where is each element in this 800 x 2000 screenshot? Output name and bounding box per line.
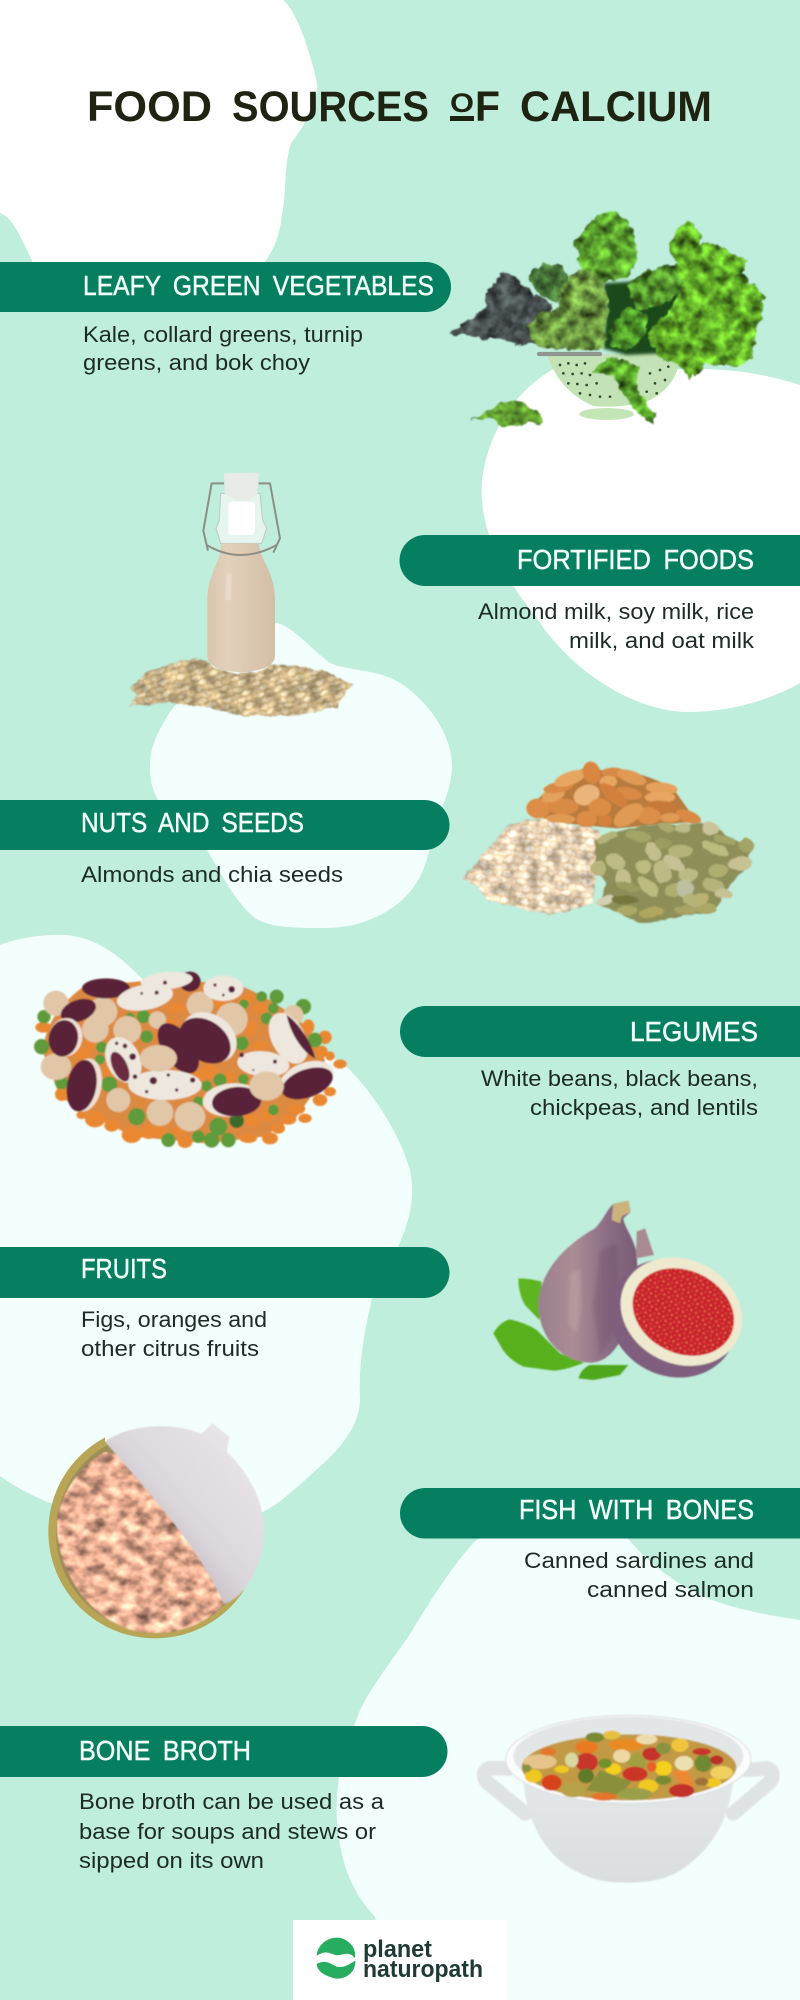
description: fruits: other citrus fruits: [81, 1336, 259, 1361]
blob: upper right white: [482, 368, 800, 712]
description: fish with bones: [524, 1548, 754, 1602]
image: bowl of vegetable soup: [484, 1715, 772, 1883]
heading bar: bone broth: [0, 1726, 448, 1777]
title: O: [450, 88, 474, 118]
vegetables: [522, 1731, 733, 1801]
description: fish with bones: canned salmon: [587, 1577, 754, 1602]
blob: top left white: [0, 0, 317, 275]
heading bar: fish with bones: FISH WITH BONES: [519, 1494, 754, 1525]
logo: [293, 1920, 508, 2000]
heading bar: fortified foods: [400, 535, 800, 586]
title: CALCIUM: [520, 83, 712, 131]
heading bar: legumes: [400, 1006, 800, 1057]
whole fig: [538, 1201, 637, 1363]
description: fruits: [81, 1307, 267, 1361]
description: fortified foods: Almond milk, soy milk, rice: [478, 599, 754, 624]
description: bone broth: Bone broth can be used as a: [79, 1789, 385, 1814]
description: bone broth: sipped on its own: [79, 1848, 264, 1873]
description: bone broth: base for soups and stews or: [79, 1819, 376, 1844]
heading bar: leafy green vegetables: [0, 262, 451, 312]
panel: fish with bones: [48, 1423, 800, 1638]
front beans: [63, 1002, 339, 1119]
description: fortified foods: [478, 599, 755, 653]
heading bar: fortified foods: FORTIFIED FOODS: [517, 544, 754, 575]
logo wordmark: naturopath: [363, 1956, 483, 1983]
title: [87, 83, 712, 131]
image: milk bottle and oats: [129, 473, 353, 716]
heading bar: nuts and seeds: [0, 800, 450, 850]
heading bar: bone broth: BONE BROTH: [79, 1735, 251, 1766]
second stem: [636, 1228, 654, 1258]
description: fortified foods: milk, and oat milk: [569, 628, 755, 653]
heading bar: legumes: LEGUMES: [630, 1016, 758, 1047]
collards: [527, 263, 573, 303]
dark shadow mass: [603, 280, 697, 355]
peas: [34, 990, 322, 1148]
logo wordmark: planet: [363, 1936, 432, 1963]
logo wordmark: [363, 1936, 483, 1983]
heading bar: fruits: [0, 1247, 450, 1298]
description: legumes: chickpeas, and lentils: [530, 1095, 758, 1120]
can rim: [48, 1438, 244, 1638]
description: leafy greens: [83, 322, 363, 375]
bright leaves: [627, 263, 685, 312]
blob: lower right pale: [337, 1517, 800, 2000]
image: greens in colander: [450, 212, 765, 427]
heading bar: fish with bones: [400, 1488, 800, 1538]
sprig: [471, 400, 543, 427]
title: F: [475, 83, 500, 131]
description: fish with bones: Canned sardines and: [524, 1548, 754, 1573]
blob: left middle pale: [0, 935, 412, 1523]
description: nuts and seeds: Almonds and chia seeds: [81, 862, 343, 887]
back beans: [46, 970, 243, 1081]
panel: fortified foods: [129, 473, 800, 716]
icon: planet naturopath swirl: [317, 1938, 355, 1979]
title: SOURCES: [232, 83, 429, 131]
description: bone broth: [79, 1789, 385, 1873]
image: canned fish with peeled lid: [48, 1423, 264, 1638]
description: leafy greens: greens, and bok choy: [83, 350, 310, 375]
image: figs with leaves: [493, 1201, 760, 1400]
back chickpeas: [41, 991, 303, 1131]
fig half: [588, 1237, 757, 1400]
almonds: [526, 759, 703, 832]
heading bar: fruits: FRUITS: [81, 1253, 167, 1284]
base pile: [43, 980, 325, 1143]
panel: leafy green vegetables: [0, 212, 765, 427]
panel: legumes: [34, 970, 800, 1148]
description: fruits: Figs, oranges and: [81, 1307, 267, 1332]
tuna: [57, 1452, 230, 1633]
romaine: [575, 212, 637, 283]
blob: centre pale: [150, 623, 452, 928]
kale: [450, 273, 552, 345]
lentils: [35, 994, 347, 1148]
image: beans, chickpeas and lentils: [34, 970, 347, 1148]
heading bar: leafy green vegetables: LEAFY GREEN VEGETABLES: [83, 270, 434, 301]
pumpkin seeds: [590, 820, 753, 922]
leaves: [518, 1278, 542, 1320]
panel: fruits: [0, 1201, 760, 1400]
description: legumes: White beans, black beans,: [481, 1066, 758, 1091]
panel: bone broth: [0, 1715, 772, 1883]
image: almonds, oats and pumpkin seeds: [462, 759, 753, 922]
title: FOOD: [87, 83, 212, 131]
lid: [105, 1423, 264, 1604]
oat grains: [462, 818, 603, 915]
heading bar: nuts and seeds: NUTS AND SEEDS: [81, 807, 304, 838]
panel: nuts and seeds: [0, 759, 753, 922]
description: legumes: [481, 1066, 758, 1120]
description: leafy greens: Kale, collard greens, turnip: [83, 322, 363, 347]
